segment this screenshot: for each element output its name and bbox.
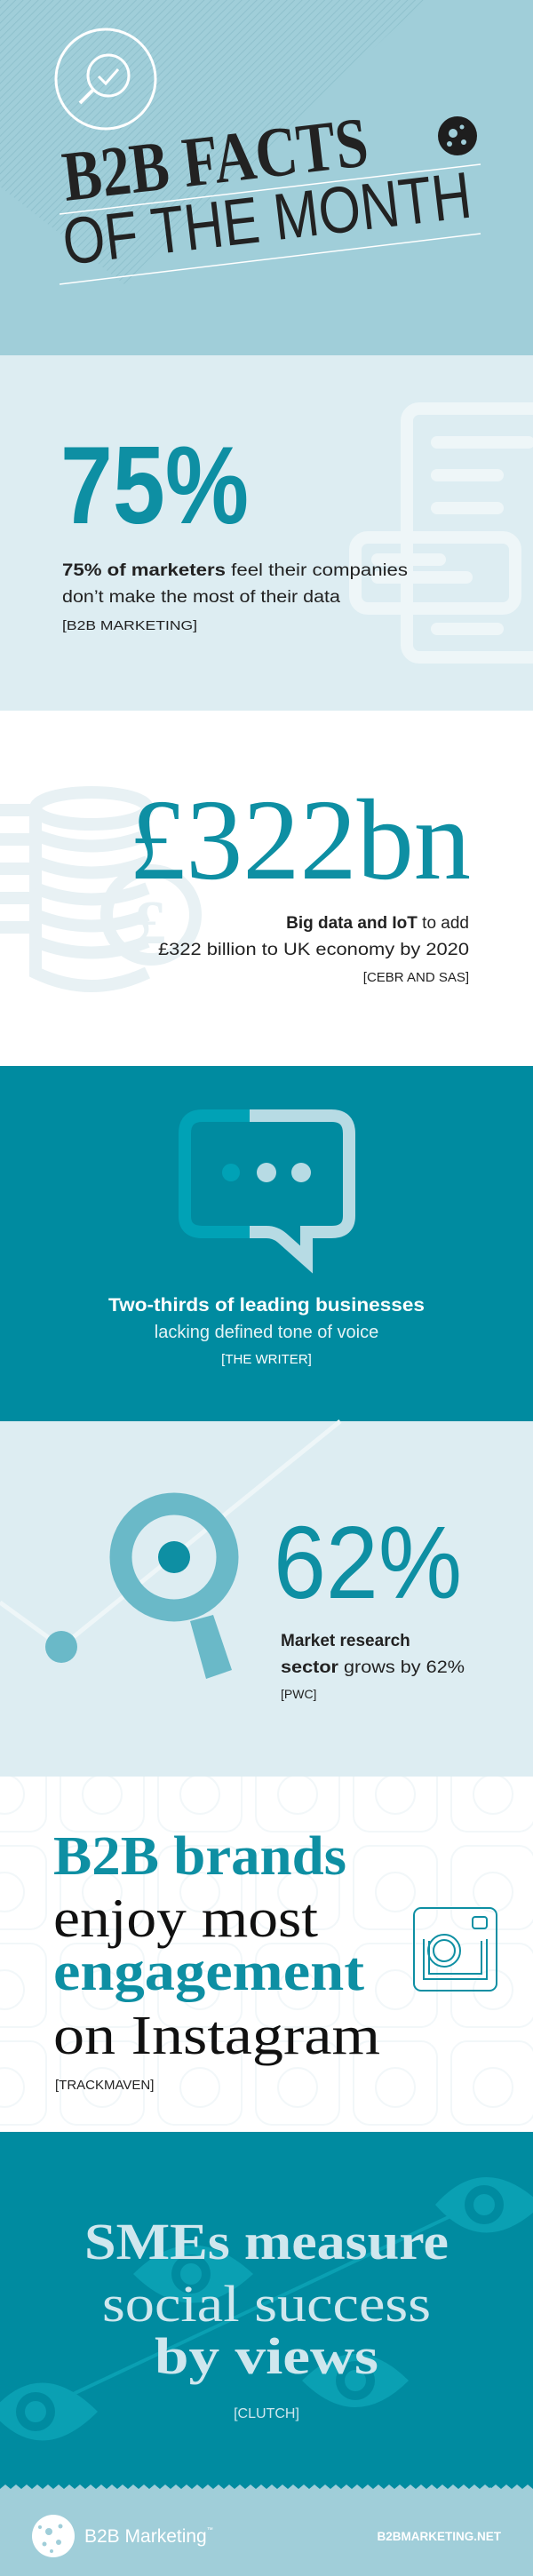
panel: tone of voice bbox=[0, 1066, 533, 1421]
panel: 75% bbox=[0, 355, 533, 711]
headline bbox=[53, 1826, 380, 2066]
text block: sector grows by 62% bbox=[281, 1658, 465, 1677]
logo bbox=[32, 2515, 213, 2557]
text block bbox=[281, 1632, 465, 1701]
icon: eyes background bbox=[0, 2177, 533, 2441]
headline: SMEs measure bbox=[84, 2213, 449, 2270]
text block: [THE WRITER] bbox=[221, 1352, 312, 1367]
headline: by views bbox=[155, 2327, 378, 2385]
text block bbox=[158, 914, 469, 985]
big number 75%: 75% bbox=[60, 425, 249, 547]
big number £322bn: £322bn bbox=[129, 776, 471, 904]
headline: social success bbox=[102, 2275, 431, 2333]
icon: documents background bbox=[355, 409, 533, 657]
panel: £322bn: £ bbox=[135, 889, 166, 958]
headline: B2B brands bbox=[53, 1826, 346, 1887]
panel: instagram bbox=[0, 1777, 533, 2132]
big number 62%: 62% bbox=[274, 1505, 462, 1620]
logo: B2B Marketing bbox=[84, 2526, 207, 2547]
text block: don’t make the most of their data bbox=[62, 588, 340, 607]
url: B2BMARKETING.NET bbox=[377, 2530, 502, 2543]
panel: SMEs views bbox=[0, 2132, 533, 2496]
text block: [PWC] bbox=[281, 1687, 316, 1701]
text block: £322 billion to UK economy by 2020 bbox=[158, 941, 469, 959]
icon: magnifier check circle bbox=[56, 29, 155, 129]
panel: footer bbox=[0, 2485, 533, 2576]
text block bbox=[62, 561, 408, 633]
text block: Market research bbox=[281, 1632, 410, 1650]
text block: Two-thirds of leading businesses bbox=[108, 1295, 425, 1316]
text block: 75% of marketers feel their companies bbox=[62, 561, 408, 580]
text block: [CEBR AND SAS] bbox=[363, 970, 469, 985]
headline bbox=[84, 2213, 449, 2385]
title: B2B FACTS bbox=[59, 103, 372, 217]
source: [TRACKMAVEN] bbox=[55, 2078, 154, 2093]
logo: ™ bbox=[207, 2527, 213, 2533]
text block bbox=[108, 1295, 425, 1367]
title bbox=[59, 103, 475, 279]
icon: magnifier bbox=[121, 1504, 232, 1679]
chart line bbox=[0, 1421, 340, 1647]
text block: lacking defined tone of voice bbox=[155, 1323, 378, 1342]
icon: dotted logo bbox=[438, 116, 477, 155]
headline: enjoy most bbox=[53, 1888, 318, 1949]
icon: instagram bbox=[414, 1908, 497, 1991]
text block: Big data and IoT to add bbox=[286, 914, 469, 933]
headline: on Instagram bbox=[53, 2006, 380, 2066]
panel: 62% bbox=[0, 1421, 533, 1777]
icon: coins background bbox=[0, 792, 195, 986]
source: [CLUTCH] bbox=[234, 2406, 299, 2421]
panel: header bbox=[0, 0, 533, 355]
icon: speech bubble bbox=[185, 1116, 349, 1260]
panel: £322bn bbox=[0, 711, 533, 1066]
headline: engagement bbox=[53, 1942, 364, 2002]
text block: [B2B MARKETING] bbox=[62, 618, 197, 633]
